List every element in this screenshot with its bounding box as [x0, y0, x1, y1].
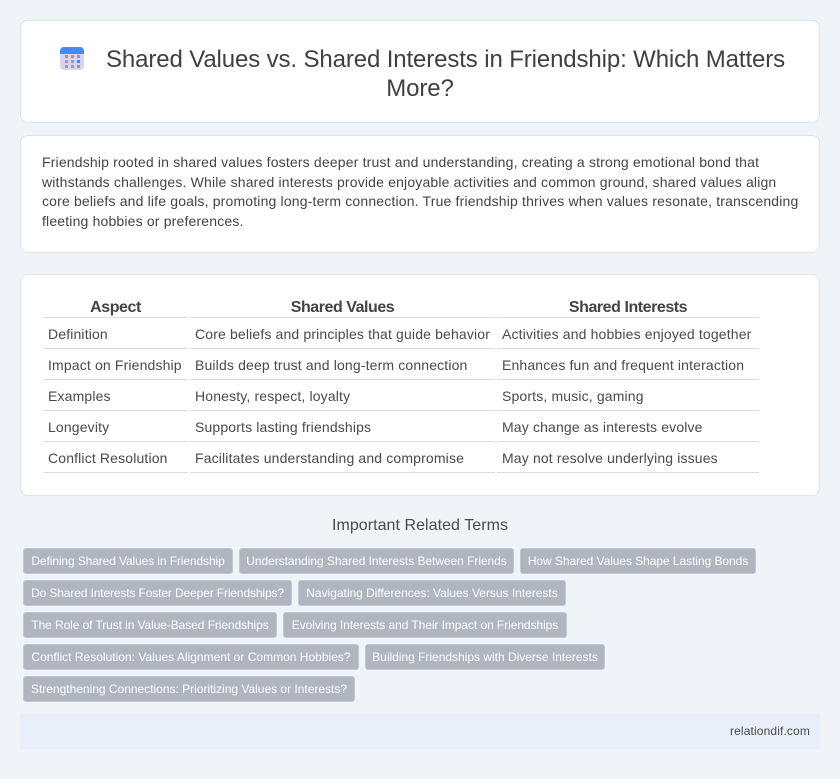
- footer bar: [20, 714, 820, 749]
- tag: [23, 612, 277, 638]
- row: Examples: [48, 388, 644, 404]
- text block: introduction: [42, 154, 798, 229]
- title: More?: [386, 75, 454, 102]
- row: Definition: Core beliefs and principles that guide behavior: [195, 326, 490, 342]
- row: Conflict Resolution: Facilitates understanding and compromise: [195, 450, 464, 466]
- tag: How Shared Values Shape Lasting Bonds: [528, 554, 748, 568]
- row: Longevity: Supports lasting friendships: [195, 419, 371, 435]
- panel: title header: [20, 20, 820, 123]
- footer: source: relationdif.com: [730, 724, 810, 738]
- row: Impact on Friendship: Builds deep trust and long-term connection: [195, 357, 467, 373]
- text block: introduction: Friendship rooted in shared values fosters deeper trust and understanding, creating a strong emotional bond that: [42, 154, 759, 170]
- tag: Defining Shared Values in Friendship: [31, 554, 225, 568]
- tag: Navigating Differences: Values Versus Interests: [306, 586, 558, 600]
- row: Impact on Friendship: Impact on Friendship: [48, 357, 182, 373]
- tag: [239, 548, 514, 574]
- header: Aspect: Aspect: [90, 299, 141, 316]
- row: Definition: [48, 326, 752, 342]
- row: Definition: Activities and hobbies enjoyed together: [502, 326, 751, 342]
- tag: Conflict Resolution: Values Alignment or Common Hobbies?: [31, 650, 351, 664]
- row: Examples: Examples: [48, 388, 111, 404]
- tag: Evolving Interests and Their Impact on Friendships: [292, 618, 558, 632]
- row: Longevity: May change as interests evolve: [502, 419, 703, 435]
- tag: Building Friendships with Diverse Interests: [372, 650, 598, 664]
- row: Definition: Definition: [48, 326, 108, 342]
- row: Conflict Resolution: [48, 450, 718, 466]
- row: Longevity: Longevity: [48, 419, 109, 435]
- panel: introduction: [20, 135, 820, 253]
- heading: Important Related Terms: Important Related Terms: [332, 517, 508, 534]
- text block: introduction: withstands challenges. While shared interests provide enjoyable activities and common ground, shared values align: [42, 174, 776, 190]
- header: Shared Values: Shared Values: [291, 299, 394, 316]
- row: Examples: Sports, music, gaming: [502, 388, 644, 404]
- text block: introduction: fleeting hobbies or preferences.: [42, 213, 244, 229]
- tag: The Role of Trust in Value-Based Friendships: [31, 618, 269, 632]
- tag: [365, 644, 605, 670]
- header: Shared Interests: Shared Interests: [569, 299, 687, 316]
- tag: [23, 644, 359, 670]
- tag: Do Shared Interests Foster Deeper Friendships?: [31, 586, 284, 600]
- row: Longevity: [48, 419, 703, 435]
- row: Conflict Resolution: May not resolve underlying issues: [502, 450, 718, 466]
- tag: [23, 548, 233, 574]
- row: Conflict Resolution: Conflict Resolution: [48, 450, 168, 466]
- tag: [520, 548, 756, 574]
- row: Impact on Friendship: Enhances fun and frequent interaction: [502, 357, 744, 373]
- tag: Understanding Shared Interests Between Friends: [246, 554, 507, 568]
- tag: [283, 612, 567, 638]
- row: Impact on Friendship: [48, 357, 744, 373]
- row: Examples: Honesty, respect, loyalty: [195, 388, 350, 404]
- tag: [23, 676, 355, 702]
- title: [106, 46, 785, 102]
- tag: Strengthening Connections: Prioritizing Values or Interests?: [31, 682, 347, 696]
- icon: calendar: [60, 47, 84, 70]
- text block: introduction: core beliefs and life goals, promoting long-term connection. True friendship thrives when values resonate, transcending: [42, 193, 798, 209]
- tag list: related terms: [23, 548, 756, 702]
- panel: comparison table: [20, 274, 820, 496]
- tag: [298, 580, 566, 606]
- tag: [23, 580, 292, 606]
- title: Shared Values vs. Shared Interests in Friendship: Which Matters: [106, 46, 785, 73]
